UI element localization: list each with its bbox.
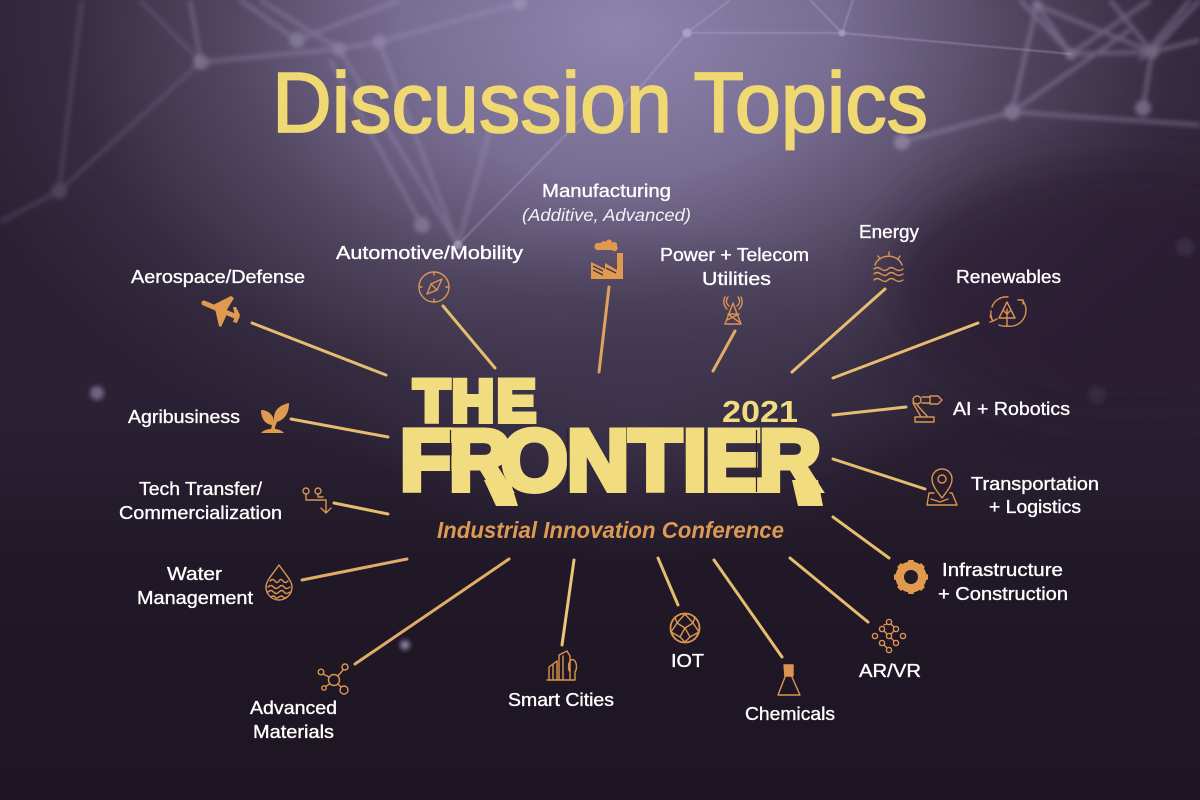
icon: geodesic globe: [670, 614, 700, 642]
topic: Smart Cities: [508, 560, 614, 710]
topic: Water Management: [137, 559, 407, 608]
connector: [302, 559, 407, 580]
label line 2: + Construction: [938, 583, 1068, 604]
logo letter tails: [484, 480, 823, 506]
icon: molecule: [318, 664, 348, 694]
topic: Transportation + Logistics: [833, 459, 1099, 517]
topic: Renewables: [833, 266, 1061, 378]
connector: [658, 558, 678, 605]
label: Aerospace/Defense: [131, 266, 305, 287]
connector: [833, 407, 906, 415]
label: Automotive/Mobility: [336, 242, 524, 263]
icon: sprout: [261, 403, 289, 433]
icon: water drop: [266, 565, 292, 600]
background blurred dots: [90, 238, 1194, 650]
topic: Agribusiness: [128, 403, 388, 437]
connector: [443, 306, 495, 368]
icon: compass: [419, 272, 449, 302]
label: Smart Cities: [508, 689, 614, 710]
topic: Aerospace/Defense: [131, 266, 386, 375]
logo tagline: Industrial Innovation Conference: [437, 517, 784, 543]
logo word: THE: THE: [414, 369, 536, 434]
topic: IOT: [658, 558, 704, 671]
connector: [833, 517, 889, 558]
label: Renewables: [956, 266, 1061, 287]
icon: airplane: [204, 296, 240, 327]
label: Transportation: [971, 473, 1099, 494]
connector: [599, 287, 609, 372]
icon: gear: [894, 560, 928, 594]
connector: [291, 419, 388, 437]
icon: robot arm: [913, 396, 942, 422]
topic: Manufacturing: [522, 180, 691, 372]
label: Tech Transfer/: [139, 478, 263, 499]
connector: [562, 560, 574, 645]
label line 2: + Logistics: [989, 496, 1081, 517]
label: Chemicals: [745, 703, 835, 724]
topic: Tech Transfer/Commercialization: [119, 478, 388, 523]
connector: [790, 558, 868, 622]
icon: recycle tree: [990, 297, 1026, 326]
topic: Power + Telecom Utilities: [660, 244, 809, 371]
label: Energy: [859, 221, 920, 242]
icon: telecom tower: [724, 297, 742, 324]
topic: Chemicals: [714, 560, 835, 724]
background network: far left: [0, 0, 201, 222]
connector: [833, 323, 978, 378]
topic: Energy: [792, 221, 920, 372]
label: AR/VR: [859, 660, 921, 681]
logo year: 2021: [722, 394, 798, 429]
icon: map pin: [927, 469, 957, 505]
topic: AR/VR: [790, 558, 921, 681]
icon: transfer arrow: [303, 488, 331, 513]
connector: [792, 289, 885, 372]
connector: [334, 503, 388, 514]
label: Agribusiness: [128, 406, 240, 427]
label line 2: Materials: [253, 721, 334, 742]
topic: AI + Robotics: [833, 396, 1070, 422]
label line 2: Commercialization: [119, 502, 282, 523]
label: Power + Telecom: [660, 244, 809, 265]
title: Discussion Topics: [272, 56, 928, 151]
topic: Automotive/Mobility: [336, 242, 524, 368]
background network: centre: [454, 0, 1071, 250]
icon: sun over waves: [874, 252, 903, 282]
background network: right: [894, 0, 1200, 150]
connector: [833, 459, 925, 489]
connector: [252, 323, 386, 375]
label: IOT: [671, 650, 704, 671]
label: Infrastructure: [942, 559, 1063, 580]
label: Manufacturing: [542, 180, 671, 201]
topic: Infrastructure + Construction: [833, 517, 1068, 604]
icon: node diamond: [872, 619, 906, 653]
sublabel: (Additive, Advanced): [522, 205, 691, 225]
connector: [714, 560, 782, 657]
label: Advanced: [250, 697, 337, 718]
icon: factory: [591, 239, 623, 279]
label: AI + Robotics: [953, 398, 1070, 419]
topic: Advanced Materials: [250, 559, 509, 742]
icon: flask: [778, 665, 800, 695]
icon: city buildings: [547, 651, 576, 680]
background network: top left: [190, 0, 527, 245]
label line 2: Management: [137, 587, 253, 608]
gear hole: [904, 570, 918, 584]
logo word: FRONTIER: FRONTIER: [400, 413, 821, 509]
label: Water: [167, 563, 222, 584]
connector: [713, 331, 735, 371]
logo: The Frontier 2021: [400, 369, 823, 543]
label line 2: Utilities: [702, 268, 771, 289]
connector: [355, 559, 509, 664]
